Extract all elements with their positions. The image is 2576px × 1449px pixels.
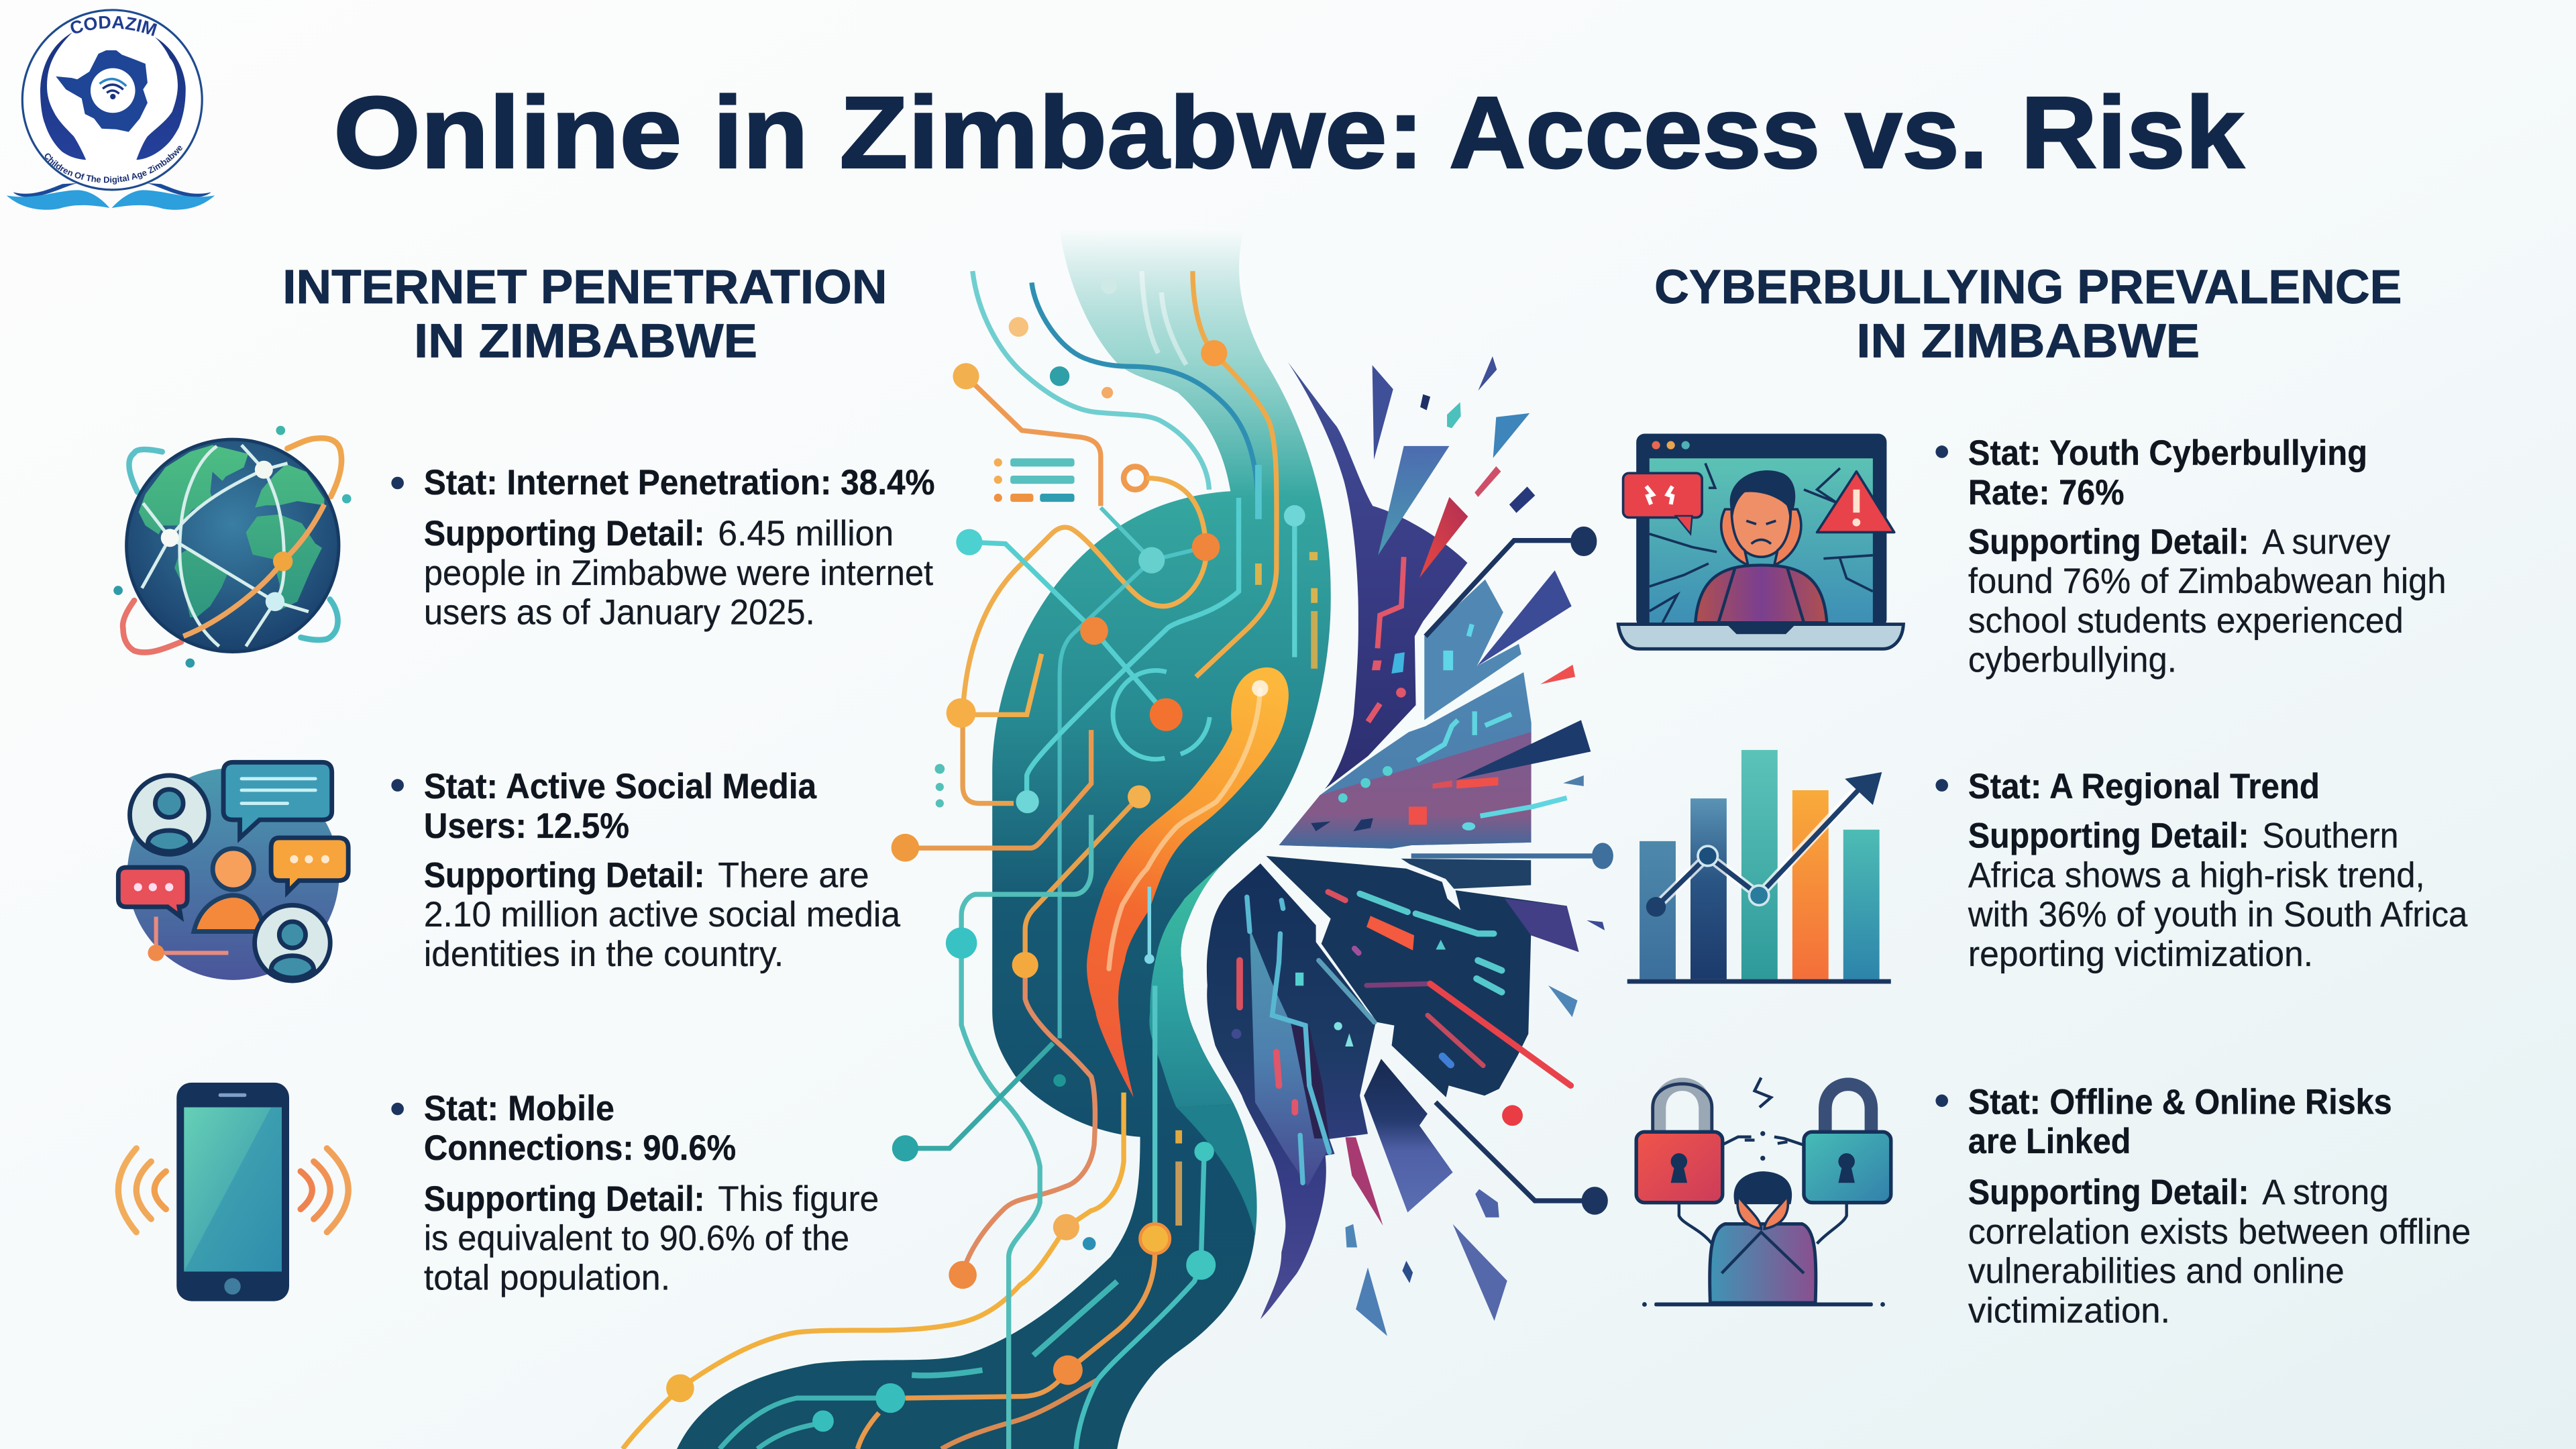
central illustration: data stream and shattered shards — [623, 230, 1613, 1449]
shard details on upper pieces — [1311, 557, 1567, 831]
teal circuit line 1 — [973, 271, 1209, 490]
text block: offline and online risks: victimization. — [1968, 1291, 2170, 1330]
shard: purple upper — [1288, 362, 1467, 789]
text block: youth cyberbullying: Stat: Youth Cyberbullying — [1968, 433, 2367, 473]
text block: internet penetration: Supporting Detail: — [424, 514, 705, 553]
title: Online — [333, 76, 682, 190]
lower nodes — [666, 786, 1216, 1432]
shard: lighter streak in left piece — [1250, 928, 1327, 1186]
text block: youth cyberbullying: Supporting Detail: — [1968, 522, 2249, 561]
text block: youth cyberbullying: A survey — [2262, 522, 2391, 561]
icon: mobile phone — [118, 1083, 348, 1301]
heading: cyberbullying prevalence — [1654, 261, 2402, 368]
connector: lower right node — [1436, 1102, 1607, 1214]
title: Risk — [2021, 76, 2245, 190]
title — [333, 76, 2245, 190]
small light blue probe — [1144, 887, 1155, 964]
text block: internet penetration: people in Zimbabwe were internet — [424, 553, 933, 593]
circuit nodes upper — [934, 278, 1318, 813]
text block: youth cyberbullying: cyberbullying. — [1968, 641, 2177, 680]
icon: globe — [113, 426, 352, 667]
shard: dark overlay in left piece — [1291, 1025, 1329, 1138]
heading: cyberbullying prevalence: CYBERBULLYING PREVALENCE — [1654, 261, 2402, 314]
bullet: mobile connections — [391, 1103, 404, 1115]
text block: social media: Users: 12.5% — [424, 806, 629, 846]
bar chart: regional trend — [1627, 750, 1891, 983]
title: vs. — [1845, 76, 1988, 190]
text block: regional trend: reporting victimization. — [1968, 934, 2313, 974]
text block: internet penetration: 6.45 million — [718, 514, 894, 553]
title: Zimbabwe: — [839, 76, 1424, 190]
text block: social media: Stat: Active Social Media — [424, 767, 817, 806]
connector: upper right node — [1426, 527, 1596, 636]
orange snake — [1087, 667, 1289, 1097]
bullet: internet penetration — [391, 477, 404, 489]
heading: cyberbullying prevalence: IN ZIMBABWE — [1856, 315, 2200, 368]
text block: mobile connections: This figure — [718, 1179, 879, 1219]
text block: mobile connections: Stat: Mobile — [424, 1089, 614, 1128]
snake highlight — [1109, 690, 1260, 969]
orange circuit line 3 — [1193, 271, 1277, 677]
text block: mobile connections — [424, 1089, 879, 1297]
text block: regional trend: with 36% of youth in South Africa — [1968, 895, 2468, 934]
shard: lavender — [1364, 1059, 1453, 1212]
text block: regional trend: Stat: A Regional Trend — [1968, 767, 2320, 806]
shard: large wedge upper blue — [1279, 672, 1532, 849]
text block: internet penetration: Stat: Internet Penetration: 38.4% — [424, 463, 934, 502]
text block: youth cyberbullying — [1968, 433, 2447, 680]
icon: social network — [118, 762, 348, 981]
text block: internet penetration: users as of January 2025. — [424, 593, 815, 633]
text block: internet penetration — [424, 463, 934, 633]
text block: offline and online risks: correlation exists between offline — [1968, 1212, 2471, 1252]
connector: middle right node — [1411, 843, 1613, 869]
pale strips at stream top — [1142, 271, 1186, 365]
shard: navy strip right — [1401, 859, 1531, 889]
text block: regional trend: Africa shows a high-risk trend, — [1968, 855, 2425, 895]
bullet: youth cyberbullying — [1935, 445, 1948, 458]
shard: dark centre — [1266, 856, 1578, 1097]
list icon — [994, 458, 1075, 502]
text block: offline and online risks: Supporting Detail: — [1968, 1173, 2249, 1212]
flowing stream — [677, 230, 1331, 1449]
text block: offline and online risks: vulnerabilities and online — [1968, 1252, 2345, 1291]
text block: mobile connections: total population. — [424, 1258, 670, 1297]
scattered shard fragments — [1345, 356, 1605, 1336]
teal node line with target ring — [969, 465, 1295, 1038]
lower band shade — [1176, 1104, 1257, 1236]
text block: offline and online risks — [1968, 1082, 2471, 1330]
logo: CODAZIM: Children Of The Digital Age Zimbabwe — [44, 146, 182, 184]
inner teal band — [1149, 863, 1234, 1108]
text block: youth cyberbullying: school students experienced — [1968, 601, 2404, 641]
bullet: regional trend — [1935, 779, 1948, 792]
shard: crimson spike — [1345, 1137, 1383, 1226]
text block: offline and online risks: A strong — [2262, 1173, 2389, 1212]
text block: social media: 2.10 million active social media — [424, 895, 901, 934]
text block: youth cyberbullying: found 76% of Zimbabwean high — [1968, 561, 2447, 601]
text block: social media: identities in the country. — [424, 934, 784, 974]
heading: internet penetration — [282, 261, 887, 368]
orange circuit line 4 — [966, 376, 1101, 506]
text block: social media: There are — [718, 855, 869, 895]
text block: mobile connections: Connections: 90.6% — [424, 1128, 736, 1168]
shard: wedge purple lower — [1279, 732, 1531, 849]
shard: big left with tail — [1207, 863, 1376, 1320]
orange lines lower — [623, 730, 1155, 1449]
text block: mobile connections: Supporting Detail: — [424, 1179, 705, 1219]
logo: CODAZIM — [7, 9, 215, 210]
text block: youth cyberbullying: Rate: 76% — [1968, 473, 2125, 513]
text block: regional trend: Southern — [2262, 816, 2399, 856]
teal lines lower — [720, 815, 1204, 1449]
text block: social media: Supporting Detail: — [424, 855, 705, 895]
text block: regional trend — [1968, 767, 2468, 974]
bullet: social media — [391, 779, 404, 792]
text block: regional trend: Supporting Detail: — [1968, 816, 2249, 856]
icon: padlocks and chained person — [1636, 1078, 1891, 1307]
text block: offline and online risks: are Linked — [1968, 1122, 2131, 1161]
shard: blue upper — [1424, 580, 1521, 720]
heading: internet penetration: INTERNET PENETRATION — [282, 261, 887, 314]
shard: purple right part — [1505, 899, 1578, 952]
title: Access — [1449, 76, 1820, 190]
text block: mobile connections: is equivalent to 90.6% of the — [424, 1219, 849, 1258]
text block: offline and online risks: Stat: Offline & Online Risks — [1968, 1082, 2392, 1122]
bullet: offline and online risks — [1935, 1095, 1948, 1107]
shard details on lower pieces — [1232, 892, 1570, 1183]
text block: social media — [424, 767, 901, 974]
title: in — [713, 76, 808, 190]
icon: laptop with distressed youth — [1618, 434, 1903, 649]
heading: internet penetration: IN ZIMBABWE — [414, 315, 757, 368]
blue circuit line 2 — [1032, 282, 1258, 519]
ring node and looping orange line — [961, 467, 1206, 804]
logo: CODAZIM: CODAZIM — [70, 16, 157, 36]
